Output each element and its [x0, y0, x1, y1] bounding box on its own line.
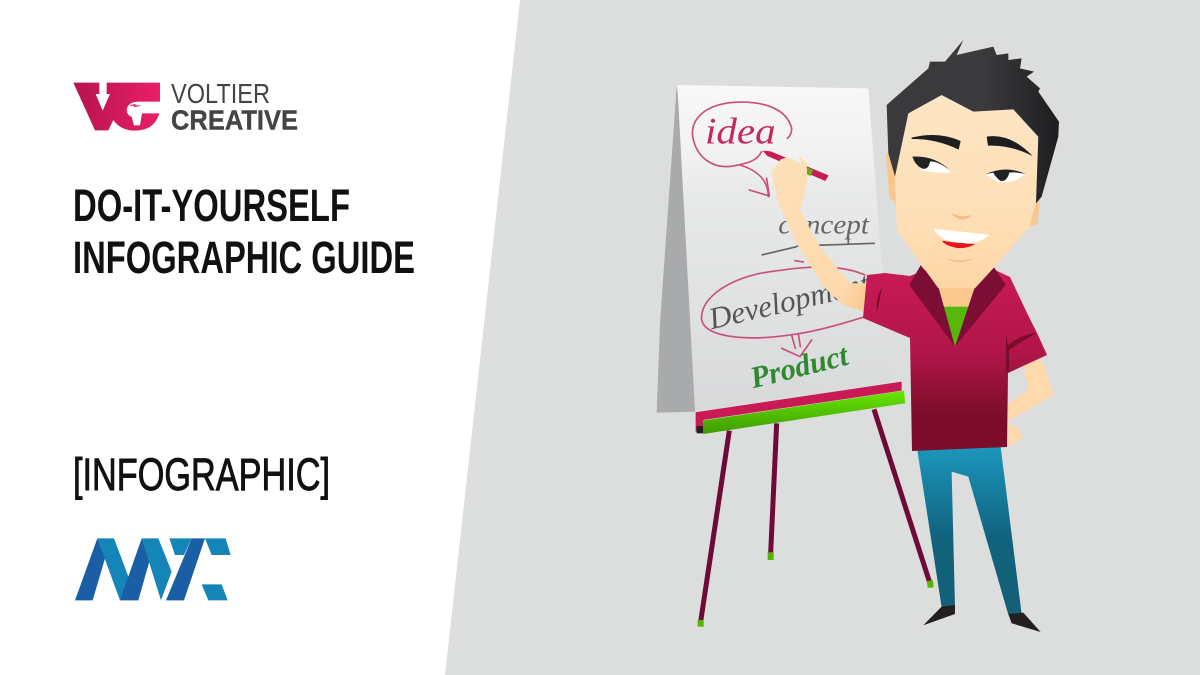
face — [895, 96, 1041, 288]
sketch text: idea: idea — [705, 111, 776, 152]
logo wordmark: CREATIVE: CREATIVE — [171, 104, 298, 136]
heading: guide title — [73, 180, 415, 283]
logo wordmark: VOLTIER: VOLTIER — [171, 78, 270, 109]
drawing arm with hand — [763, 151, 867, 312]
illustration: presenter character — [763, 40, 1059, 632]
collar — [909, 265, 1006, 347]
label: infographic tag: [INFOGRAPHIC] — [73, 449, 330, 500]
easel legs — [701, 409, 931, 627]
mouth — [933, 229, 989, 248]
nose — [950, 213, 972, 219]
logo: MTC monogram — [75, 538, 231, 600]
character legs and trousers — [917, 359, 1054, 632]
sketch: concept underline — [762, 230, 875, 255]
heading: guide title: INFOGRAPHIC GUIDE — [73, 232, 415, 283]
left eye — [912, 156, 951, 173]
ears — [886, 153, 1041, 227]
illustration: flip chart easel — [657, 85, 931, 627]
logo: Voltier Creative — [73, 78, 298, 136]
right eye — [986, 169, 1026, 182]
icon: VC monogram — [73, 83, 160, 131]
easel tray — [696, 382, 905, 434]
right shoe — [1008, 613, 1041, 632]
pencil — [763, 151, 829, 181]
left shoe — [923, 605, 955, 625]
eyebrows — [912, 135, 1033, 156]
left arm on hip — [1005, 359, 1054, 447]
shirt — [863, 270, 1047, 451]
sketch: idea bubble — [692, 102, 792, 197]
flip chart sheets — [657, 85, 905, 434]
green undershirt — [942, 307, 972, 347]
head group — [886, 40, 1059, 347]
neck — [937, 277, 976, 308]
grey background panel — [445, 0, 1200, 675]
sketch text: Product: Product — [746, 338, 853, 395]
sketch text: concept: concept — [778, 209, 870, 239]
heading: guide title: DO-IT-YOURSELF — [73, 180, 350, 231]
sketch text: Development: Development — [705, 266, 874, 336]
hair — [887, 40, 1059, 203]
chin shadow — [945, 258, 974, 262]
sketch: development ellipse — [702, 261, 865, 357]
shirt sleeve folds — [877, 287, 1037, 372]
